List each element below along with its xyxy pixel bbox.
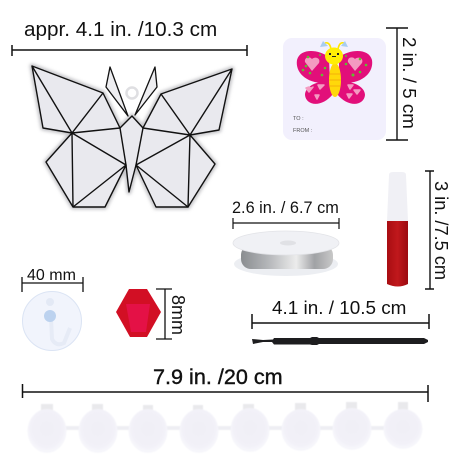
suction cup: [22, 292, 82, 350]
label: hook diameter: 40 mm: [27, 267, 76, 284]
body stripes: [329, 74, 341, 86]
hanging ring: [126, 88, 138, 98]
bead shape: [116, 289, 161, 337]
dimension line: spool width: [233, 218, 339, 229]
hook: [51, 318, 70, 344]
dimension line: bead height: [156, 289, 172, 339]
to label: TO :: [293, 116, 304, 122]
head: [325, 48, 343, 64]
label: wire spool width: 2.6 in. / 6.7 cm: [232, 199, 339, 217]
antenna tips: [320, 41, 348, 47]
eyes and mouth: [329, 53, 339, 57]
wing hearts: [305, 57, 362, 71]
pot 3: [128, 409, 168, 453]
wire coil: [241, 245, 333, 269]
pot 8: [384, 409, 422, 449]
paint pot strip: [28, 402, 422, 453]
butterfly facets: [32, 66, 232, 207]
pot tabs: [41, 402, 408, 413]
antennae: [325, 43, 344, 49]
upper wings: [297, 51, 372, 83]
label: butterfly width: appr. 4.1 in. /10.3 cm: [24, 18, 217, 41]
tube body: [387, 221, 408, 286]
card background: [283, 38, 386, 140]
connectors: [50, 426, 395, 430]
pot 7: [332, 408, 372, 450]
dimension line: suction hook width: [22, 277, 83, 292]
tag butterfly illustration: [297, 41, 372, 104]
hook top: [46, 298, 54, 306]
pot 2: [78, 409, 118, 453]
upper flange: [233, 231, 339, 255]
dimension line: card height: [386, 28, 408, 140]
dimension line: butterfly width: [12, 45, 247, 56]
butterfly shadow: [32, 66, 232, 207]
label: tube height: 3 in. /7.5 cm: [431, 181, 451, 280]
bead facets: [126, 304, 150, 332]
label: bead height: 8mm: [168, 295, 188, 335]
hook knob: [44, 310, 56, 322]
suncatcher butterfly: [32, 66, 232, 207]
body: [329, 63, 341, 97]
suction cup hook: [22, 292, 82, 350]
butterfly antennae: [106, 67, 157, 116]
label: paint strip width: 7.9 in. /20 cm: [153, 364, 283, 389]
butterfly outline: [32, 66, 232, 207]
wing dots: [302, 54, 367, 76]
pot 6: [282, 409, 320, 451]
paint tube: [387, 172, 408, 286]
paint brush: [252, 337, 428, 345]
label: brush length: 4.1 in. / 10.5 cm: [272, 298, 406, 319]
pot 4: [180, 409, 218, 453]
pot 1: [28, 409, 66, 453]
dimension line: brush length: [252, 314, 429, 329]
pot 5: [230, 408, 270, 452]
tube cap: [387, 172, 408, 221]
lower flange: [234, 252, 338, 276]
red faceted bead: [116, 289, 161, 337]
lower wings: [305, 82, 365, 104]
lower wing hearts: [306, 85, 360, 99]
from label: FROM :: [293, 128, 313, 134]
gift tag card: [283, 38, 386, 140]
label: card height: 2 in. / 5 cm: [399, 37, 420, 129]
spool hub: [280, 240, 296, 246]
wire spool: [233, 231, 339, 276]
dimension line: paint strip width: [22, 384, 428, 402]
dimension line: tube height: [425, 171, 434, 289]
